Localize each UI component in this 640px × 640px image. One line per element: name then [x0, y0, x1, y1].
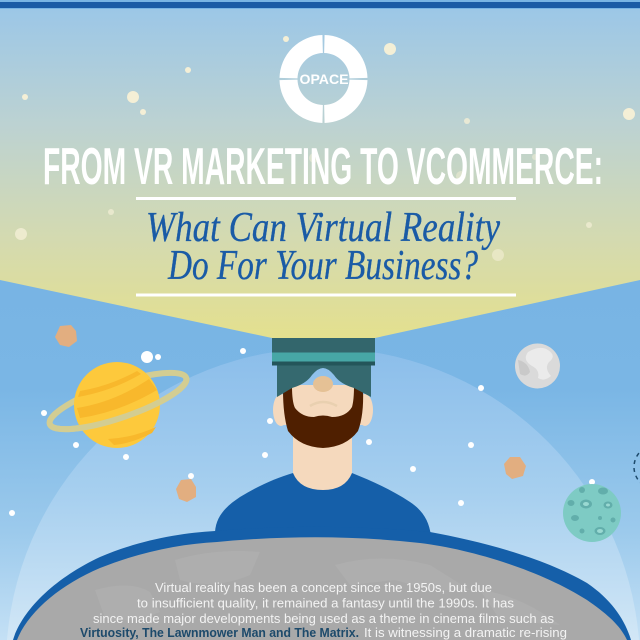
- cream stars: [15, 36, 635, 261]
- neck: [293, 430, 352, 490]
- planet: teal cratered: [563, 484, 621, 542]
- headset teal stripe: [272, 352, 375, 362]
- logo: OPACE: [288, 44, 358, 114]
- logo: OPACE: OPACE: [300, 71, 348, 87]
- mouth: [310, 402, 337, 406]
- beard: [283, 386, 363, 448]
- asteroid: upper left: [55, 325, 77, 347]
- white stars: [9, 348, 595, 516]
- projected light beam: [0, 9, 640, 338]
- intro paragraph: [80, 580, 567, 640]
- headset band top: [272, 338, 375, 353]
- face: [284, 385, 362, 425]
- dome glow: [7, 348, 639, 640]
- subtitle: What Can Virtual Reality: [146, 205, 500, 251]
- person wearing VR headset: [215, 338, 431, 545]
- intro paragraph: Virtual reality has been a concept since the 1950s, but due: [155, 580, 492, 595]
- ears: [273, 394, 289, 426]
- intro paragraph: Virtuosity, The Lawnmower Man and The Matrix.: [80, 625, 359, 640]
- top bar: [0, 2, 640, 8]
- headset band bottom: [272, 362, 375, 366]
- subtitle: [146, 205, 500, 289]
- shirt: [215, 473, 431, 545]
- subtitle: Do For Your Business?: [167, 243, 478, 289]
- intro paragraph: since made major developments being used as a theme in cinema films such as: [93, 611, 554, 626]
- asteroid: lower left: [176, 479, 196, 502]
- world map silhouette: [95, 551, 560, 625]
- planet: ringed yellow: [44, 362, 192, 448]
- rule below subtitle: [136, 294, 516, 296]
- intro paragraph: It is witnessing a dramatic re-rising: [364, 625, 567, 640]
- asteroid: right: [504, 457, 526, 479]
- planet: grey moon: [515, 344, 560, 388]
- rule above subtitle: [136, 197, 516, 200]
- intro paragraph: to insufficient quality, it remained a fantasy until the 1990s. It has: [137, 596, 514, 610]
- headset lower visor: [277, 365, 371, 397]
- dashed orbit: [634, 445, 640, 489]
- globe: [17, 537, 627, 640]
- nose: [313, 376, 333, 392]
- globe rim: [13, 527, 631, 640]
